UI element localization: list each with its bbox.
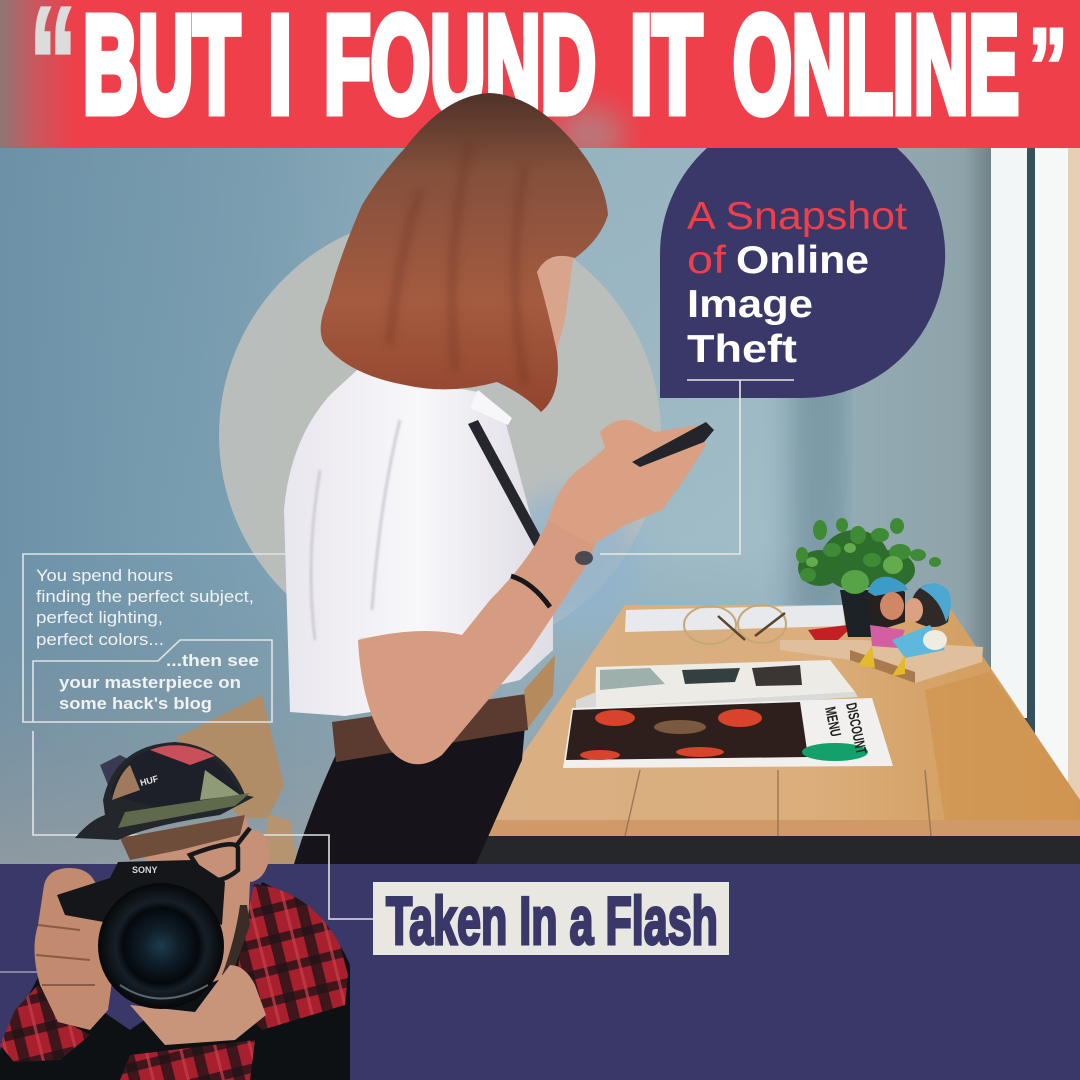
hat floral: HUF bbox=[139, 773, 160, 788]
plaid bottom bbox=[120, 1040, 255, 1080]
shirt bbox=[284, 360, 553, 716]
ear and face bbox=[120, 815, 270, 985]
magazines bbox=[563, 660, 893, 768]
callout text bbox=[36, 566, 259, 713]
finger lines bbox=[36, 925, 95, 985]
watch bbox=[575, 551, 593, 565]
camera body bbox=[57, 860, 225, 925]
forehead shadow bbox=[120, 815, 245, 860]
magazines: MENU bbox=[821, 705, 844, 738]
faint line lower left bbox=[0, 971, 38, 973]
hat bbox=[75, 742, 254, 840]
chair behind subject bbox=[100, 695, 298, 866]
glasses bbox=[190, 828, 250, 880]
decorative circle behind subject bbox=[219, 214, 661, 656]
camera brand: SONY bbox=[132, 865, 158, 875]
hair bbox=[321, 93, 608, 412]
bubble heading text: Theft bbox=[687, 328, 797, 371]
blue haze on circle bbox=[500, 490, 640, 630]
right hand bbox=[130, 965, 266, 1045]
label: taken in a flash bbox=[373, 882, 729, 959]
jacket bbox=[0, 882, 350, 1080]
callout text: some hack's blog bbox=[59, 694, 212, 713]
left hand bbox=[34, 868, 115, 1030]
arm bbox=[358, 512, 600, 764]
bag strap bbox=[468, 420, 540, 548]
label: taken in a flash: Taken In a Flash bbox=[386, 883, 718, 959]
navy footer band bbox=[0, 864, 1080, 1080]
hair strands bbox=[390, 140, 525, 385]
plaid shirt right bbox=[235, 884, 348, 1030]
callout outline bbox=[23, 554, 287, 722]
bubble heading text: Online bbox=[736, 239, 869, 282]
bubble heading text: Image bbox=[687, 283, 813, 326]
belt bbox=[332, 694, 528, 762]
wooden block bbox=[780, 640, 983, 683]
photo background: wall bbox=[0, 148, 860, 864]
header banner bbox=[0, 0, 1080, 148]
window frame column bbox=[853, 148, 1080, 808]
hand bbox=[548, 420, 706, 545]
skirt bbox=[294, 725, 525, 864]
bubble: title panel bbox=[660, 148, 945, 398]
photographer bbox=[0, 742, 350, 1080]
connector line from bubble bbox=[600, 380, 794, 554]
shirt folds bbox=[311, 420, 470, 640]
callout text: perfect colors... bbox=[36, 630, 164, 649]
magazines: DISCOUNT bbox=[842, 701, 870, 756]
phone bbox=[632, 422, 714, 467]
table bbox=[476, 605, 1080, 864]
subject: woman bbox=[284, 93, 714, 864]
kissing figurines bbox=[858, 577, 951, 676]
callout text: ...then see bbox=[166, 651, 259, 670]
bubble heading text: A Snapshot bbox=[687, 195, 907, 238]
bubble heading text: of bbox=[687, 239, 726, 282]
callout text: finding the perfect subject, bbox=[36, 587, 254, 606]
plaid sleeve left bbox=[0, 985, 90, 1062]
table papers and glasses bbox=[625, 605, 855, 644]
hat floral bbox=[110, 745, 250, 828]
connector to photographer and label bbox=[33, 731, 373, 919]
callout text: You spend hours bbox=[36, 566, 173, 585]
chair slat bbox=[524, 655, 555, 728]
callout text: your masterpiece on bbox=[59, 673, 241, 692]
face bbox=[535, 252, 574, 368]
callout text: perfect lighting, bbox=[36, 608, 163, 627]
beard bbox=[222, 905, 250, 975]
title bbox=[29, 0, 1068, 152]
collar bbox=[470, 390, 512, 425]
bracelet bbox=[511, 576, 550, 607]
camera lens bbox=[98, 883, 224, 1009]
lens glint bbox=[120, 985, 208, 998]
potted plant bbox=[796, 518, 941, 637]
bubble heading text bbox=[687, 195, 907, 371]
banner fade near hair bbox=[556, 107, 624, 163]
